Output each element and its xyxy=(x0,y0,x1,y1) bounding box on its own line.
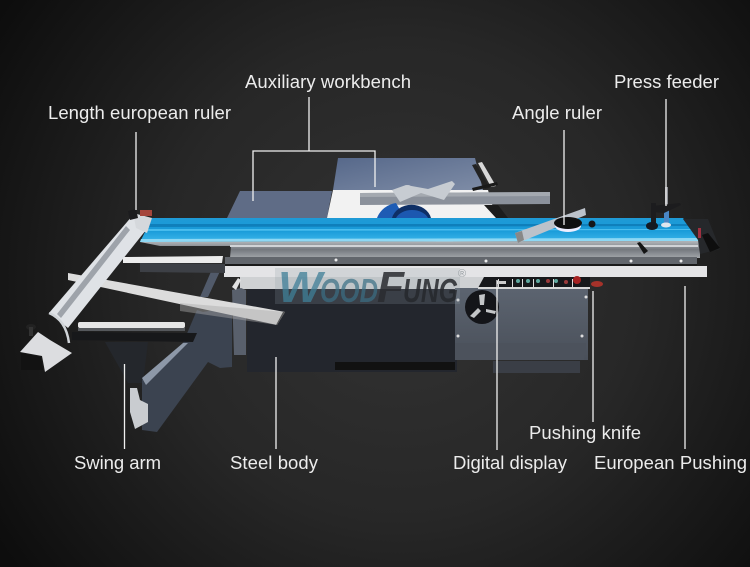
leader: Length european ruler xyxy=(135,132,137,210)
sliding table blue top xyxy=(140,218,700,242)
press feeder clamp xyxy=(646,187,681,230)
length ruler arm and end stop xyxy=(20,209,152,372)
leader: Angle ruler xyxy=(563,130,565,225)
logo watermark: OOD xyxy=(320,272,378,309)
rail end block and lever xyxy=(637,219,720,254)
panel: auxiliary workbench tables xyxy=(227,158,550,218)
leader: Pushing knife xyxy=(592,291,594,422)
label: Press feeder: Press feeder xyxy=(614,71,719,92)
icon: red pushing knife handle xyxy=(591,281,603,287)
logo watermark xyxy=(275,263,466,312)
label: Swing arm: Swing arm xyxy=(74,452,161,473)
icon: saw blade and guard xyxy=(377,181,498,218)
logo watermark: F xyxy=(377,263,405,312)
miter fence angle ruler xyxy=(515,208,596,243)
logo watermark: W xyxy=(278,263,326,312)
panel: swing arm support xyxy=(105,267,246,432)
crossbars of sliding frame xyxy=(68,256,285,342)
label: Length european ruler: Length european ruler xyxy=(48,102,231,123)
panel: machine cabinet xyxy=(455,288,588,373)
label: Auxiliary workbench: Auxiliary workbench xyxy=(245,71,411,92)
logo watermark: ® xyxy=(458,268,466,280)
leader: Press feeder xyxy=(665,99,667,206)
leader: Digital display xyxy=(496,280,498,450)
label: Pushing knife: Pushing knife xyxy=(529,422,641,443)
leader: European Pushing xyxy=(684,286,686,449)
label: Angle ruler: Angle ruler xyxy=(512,102,602,123)
label: European Pushing: European Pushing xyxy=(594,452,747,473)
panel: steel body xyxy=(247,289,457,372)
icon: handwheel xyxy=(465,290,499,324)
leader: Auxiliary workbench bracket xyxy=(253,97,375,201)
label: Digital display: Digital display xyxy=(453,452,568,473)
sliding table rail xyxy=(140,241,707,289)
leader: Steel body xyxy=(275,357,277,449)
logo watermark: UNG xyxy=(403,272,458,309)
leader: Swing arm xyxy=(124,364,126,449)
control panel with buttons xyxy=(478,276,590,289)
label: Steel body: Steel body xyxy=(230,452,319,473)
